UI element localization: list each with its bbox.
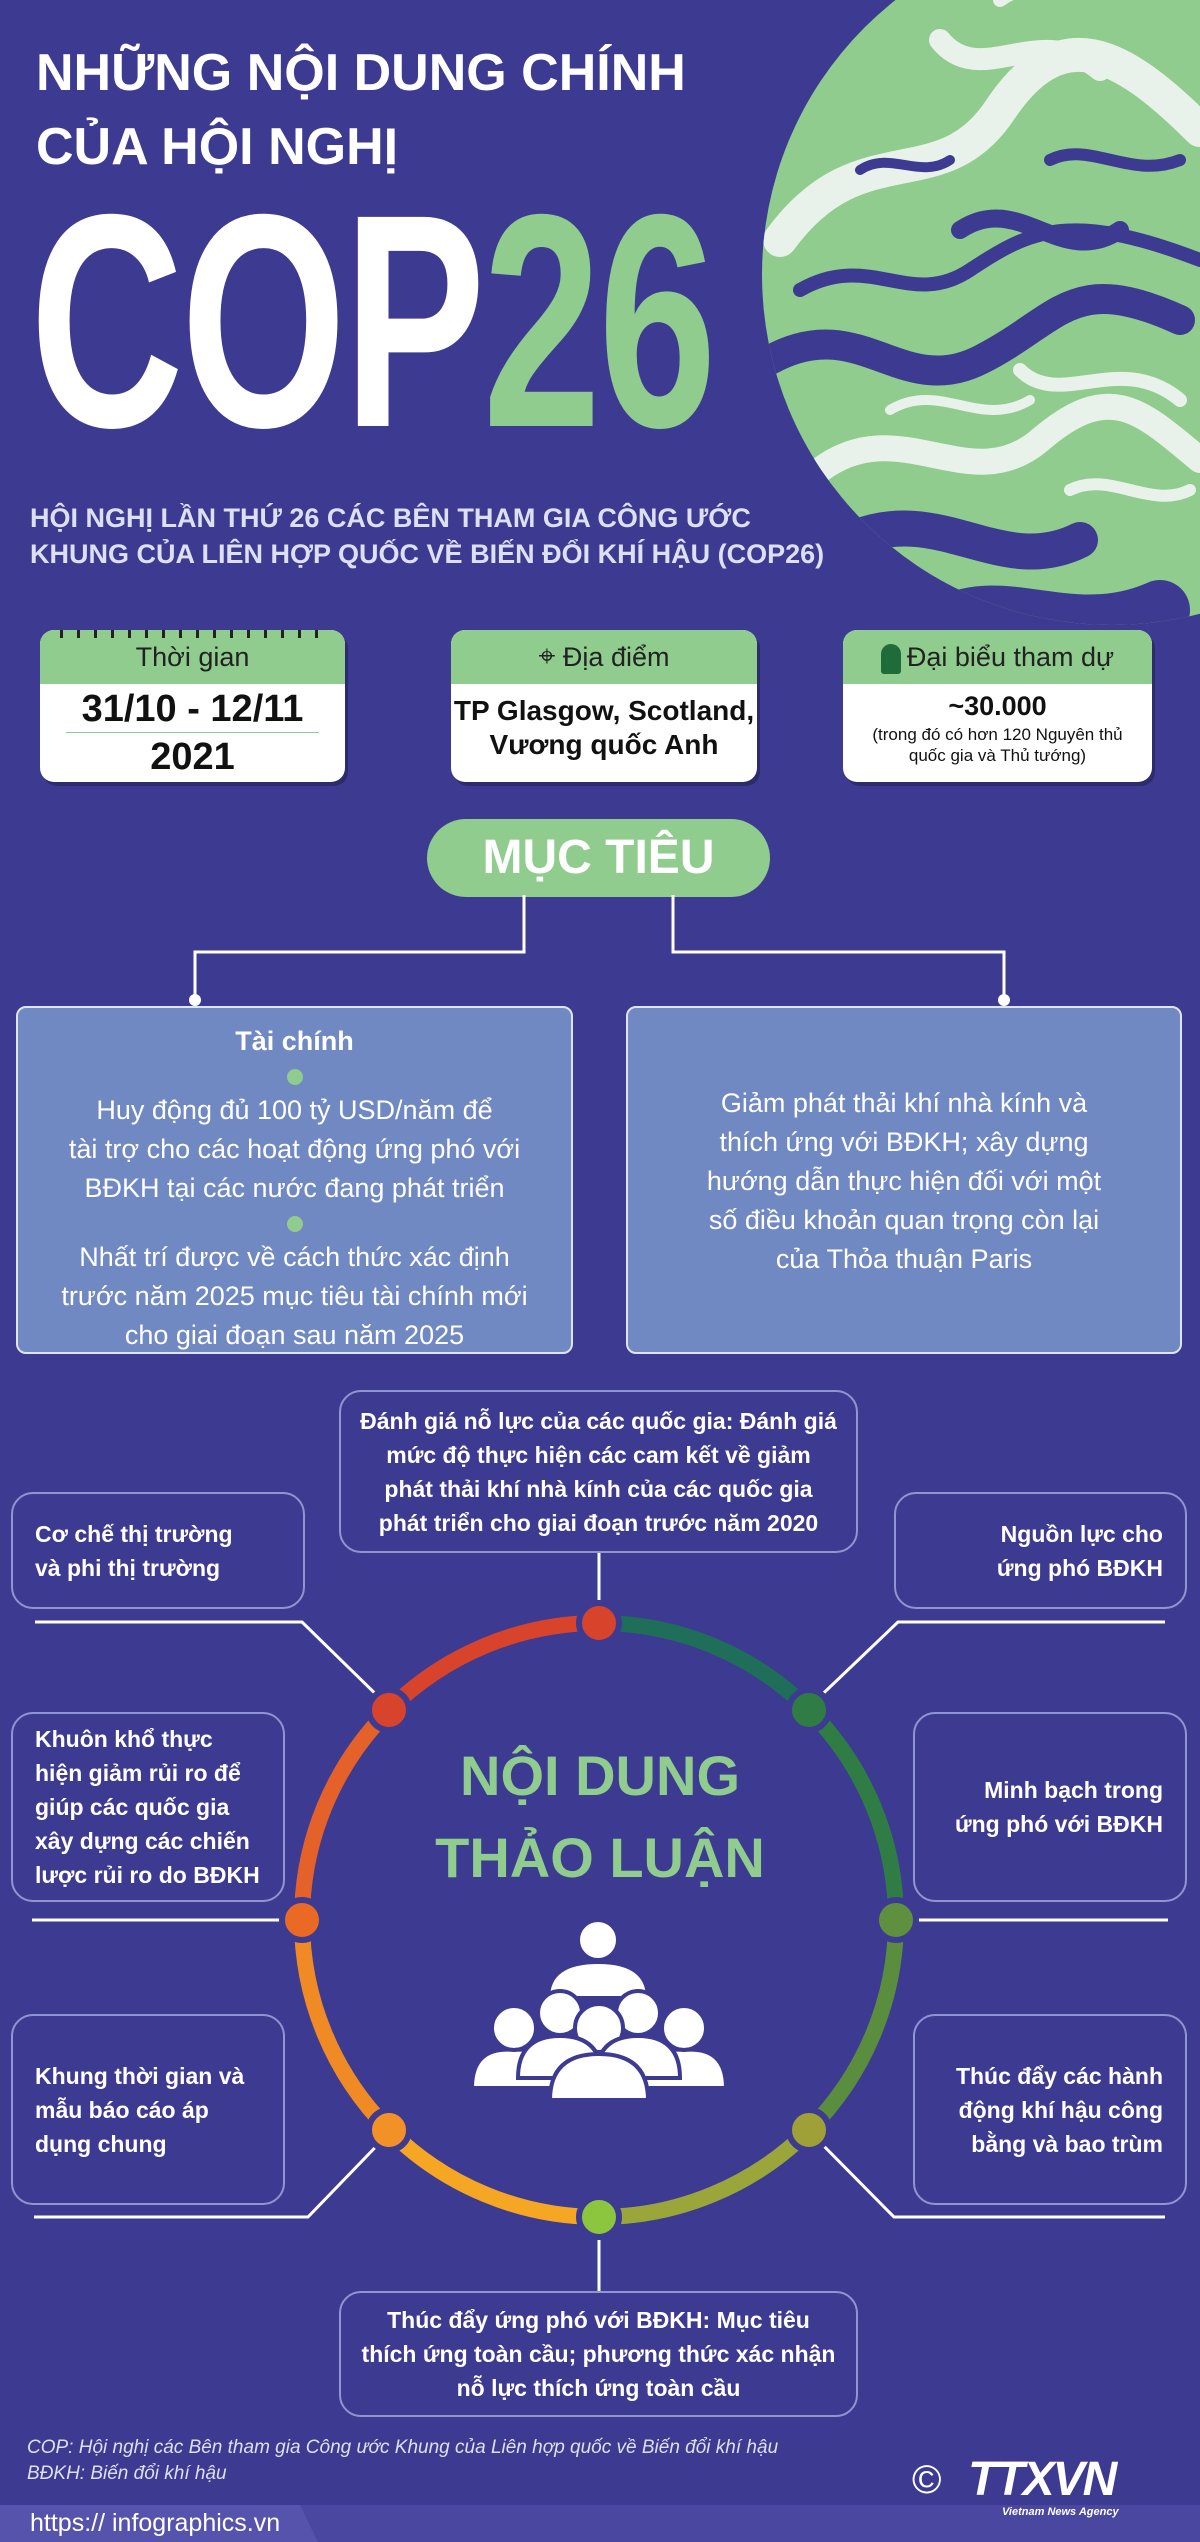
- icon: meeting people: [474, 1922, 724, 2098]
- footnotes: BĐKH: Biến đổi khí hậu: [27, 2463, 227, 2484]
- title: [36, 44, 686, 176]
- card: location: ⌖ Địa điểm: [539, 640, 669, 673]
- box: timeframes: mẫu báo cáo áp: [35, 2096, 209, 2122]
- panel: finance: Nhất trí được về cách thức xác định: [79, 1242, 510, 1272]
- card: location: TP Glasgow, Scotland,: [454, 695, 754, 726]
- box: top assessment: Đánh giá nỗ lực của các quốc gia: Đánh giá: [360, 1408, 837, 1434]
- center heading: NỘI DUNG: [460, 1744, 740, 1807]
- card: time: 31/10 - 12/11: [82, 688, 303, 730]
- box: resources: ứng phó BĐKH: [997, 1554, 1163, 1580]
- box: top assessment: phát triển cho giai đoạn trước năm 2020: [379, 1510, 818, 1536]
- logo TTXVN: ©: [912, 2458, 941, 2502]
- card: delegates: [843, 630, 1152, 782]
- panel: finance: Huy động đủ 100 tỷ USD/năm để: [96, 1095, 493, 1125]
- panel: emissions: hướng dẫn thực hiện đối với một: [707, 1166, 1101, 1196]
- box: market mechanisms: [11, 1492, 305, 1609]
- card: time: Thời gian: [136, 642, 249, 672]
- center heading: THẢO LUẬN: [435, 1826, 765, 1889]
- connectors: [189, 895, 1010, 1006]
- panel: finance: Tài chính: [235, 1026, 354, 1056]
- subtitle: HỘI NGHỊ LẦN THỨ 26 CÁC BÊN THAM GIA CÔNG ƯỚC: [30, 503, 751, 533]
- subtitle: [30, 502, 824, 569]
- panel: emissions: Giảm phát thải khí nhà kính và: [721, 1088, 1087, 1118]
- card: delegates: Đại biểu tham dự: [907, 642, 1114, 672]
- card: delegates: ~30.000: [948, 691, 1047, 721]
- heading: MỤC TIÊU: [427, 819, 770, 897]
- box: resources: Nguồn lực cho: [1001, 1520, 1163, 1546]
- box: adaptation: [339, 2291, 858, 2417]
- subtitle: KHUNG CỦA LIÊN HỢP QUỐC VỀ BIẾN ĐỔI KHÍ HẬU (COP26): [30, 539, 824, 569]
- panel: finance: BĐKH tại các nước đang phát triển: [84, 1173, 504, 1203]
- box: timeframes: [11, 2014, 285, 2205]
- footnotes: COP: Hội nghị các Bên tham gia Công ước Khung của Liên hợp quốc về Biến đổi khí hậu: [27, 2437, 778, 2458]
- card: delegates: (trong đó có hơn 120 Nguyên thủ: [872, 725, 1123, 744]
- panel: emissions: [626, 1006, 1182, 1354]
- card: time: [40, 630, 345, 782]
- title: NHỮNG NỘI DUNG CHÍNH: [36, 44, 686, 102]
- card: delegates: quốc gia và Thủ tướng): [909, 746, 1086, 765]
- discussion ring: [32, 1553, 1168, 2291]
- title: CỦA HỘI NGHỊ: [36, 118, 398, 176]
- text: https:// infographics.vn: [30, 2509, 280, 2537]
- COP26 logo text: COP26: [30, 152, 714, 491]
- box: top assessment: phát thải khí nhà kính của các quốc gia: [384, 1476, 813, 1502]
- panel: finance: [16, 1006, 573, 1354]
- box: timeframes: Khung thời gian và: [35, 2062, 244, 2088]
- box: top assessment: [339, 1390, 858, 1553]
- box: risk framework: xây dựng các chiến: [35, 1828, 250, 1854]
- box: equitable action: bằng và bao trùm: [971, 2130, 1163, 2156]
- footer url bar: [0, 2505, 1200, 2542]
- heading: MỤC TIÊU: MỤC TIÊU: [482, 831, 714, 884]
- box: market mechanisms: Cơ chế thị trường: [35, 1520, 233, 1546]
- box: risk framework: [11, 1712, 285, 1902]
- spiral rings: [60, 626, 325, 638]
- card: time: 2021: [150, 736, 235, 778]
- panel: emissions: số điều khoản quan trọng còn lại: [709, 1205, 1099, 1235]
- panel: finance: cho giai đoạn sau năm 2025: [125, 1320, 464, 1350]
- box: transparency: [913, 1712, 1187, 1902]
- center heading: [435, 1744, 765, 1889]
- footnotes: [27, 2437, 778, 2484]
- box: risk framework: giúp các quốc gia: [35, 1794, 229, 1820]
- box: equitable action: động khí hậu công: [959, 2096, 1163, 2122]
- box: risk framework: Khuôn khổ thực: [35, 1726, 213, 1752]
- box: risk framework: hiện giảm rủi ro để: [35, 1760, 241, 1786]
- box: equitable action: Thúc đẩy các hành: [956, 2062, 1163, 2088]
- logo TTXVN: TTXVN: [968, 2453, 1115, 2506]
- box: transparency: Minh bạch trong: [984, 1777, 1163, 1803]
- box: adaptation: thích ứng toàn cầu; phương thức xác nhận: [362, 2341, 835, 2367]
- card: location: Vương quốc Anh: [490, 729, 718, 760]
- box: adaptation: Thúc đẩy ứng phó với BĐKH: Mục tiêu: [387, 2307, 810, 2333]
- box: timeframes: dụng chung: [35, 2130, 167, 2156]
- logo TTXVN: [912, 2453, 1119, 2518]
- box: market mechanisms: và phi thị trường: [35, 1554, 220, 1580]
- logo TTXVN: Vietnam News Agency: [1002, 2506, 1119, 2518]
- card: location: [451, 630, 757, 782]
- box: transparency: ứng phó với BĐKH: [955, 1811, 1163, 1837]
- box: equitable action: [913, 2014, 1187, 2205]
- panel: emissions: thích ứng với BĐKH; xây dựng: [719, 1127, 1088, 1157]
- globe illustration: [762, 0, 1200, 625]
- panel: finance: tài trợ cho các hoạt động ứng phó với: [69, 1134, 520, 1164]
- box: adaptation: nỗ lực thích ứng toàn cầu: [457, 2375, 740, 2401]
- box: resources: [894, 1492, 1187, 1609]
- box: top assessment: mức độ thực hiện các cam kết về giảm: [386, 1442, 811, 1468]
- box: risk framework: lược rủi ro do BĐKH: [35, 1862, 260, 1888]
- panel: emissions: của Thỏa thuận Paris: [776, 1244, 1032, 1274]
- panel: finance: trước năm 2025 mục tiêu tài chính mới: [61, 1281, 528, 1311]
